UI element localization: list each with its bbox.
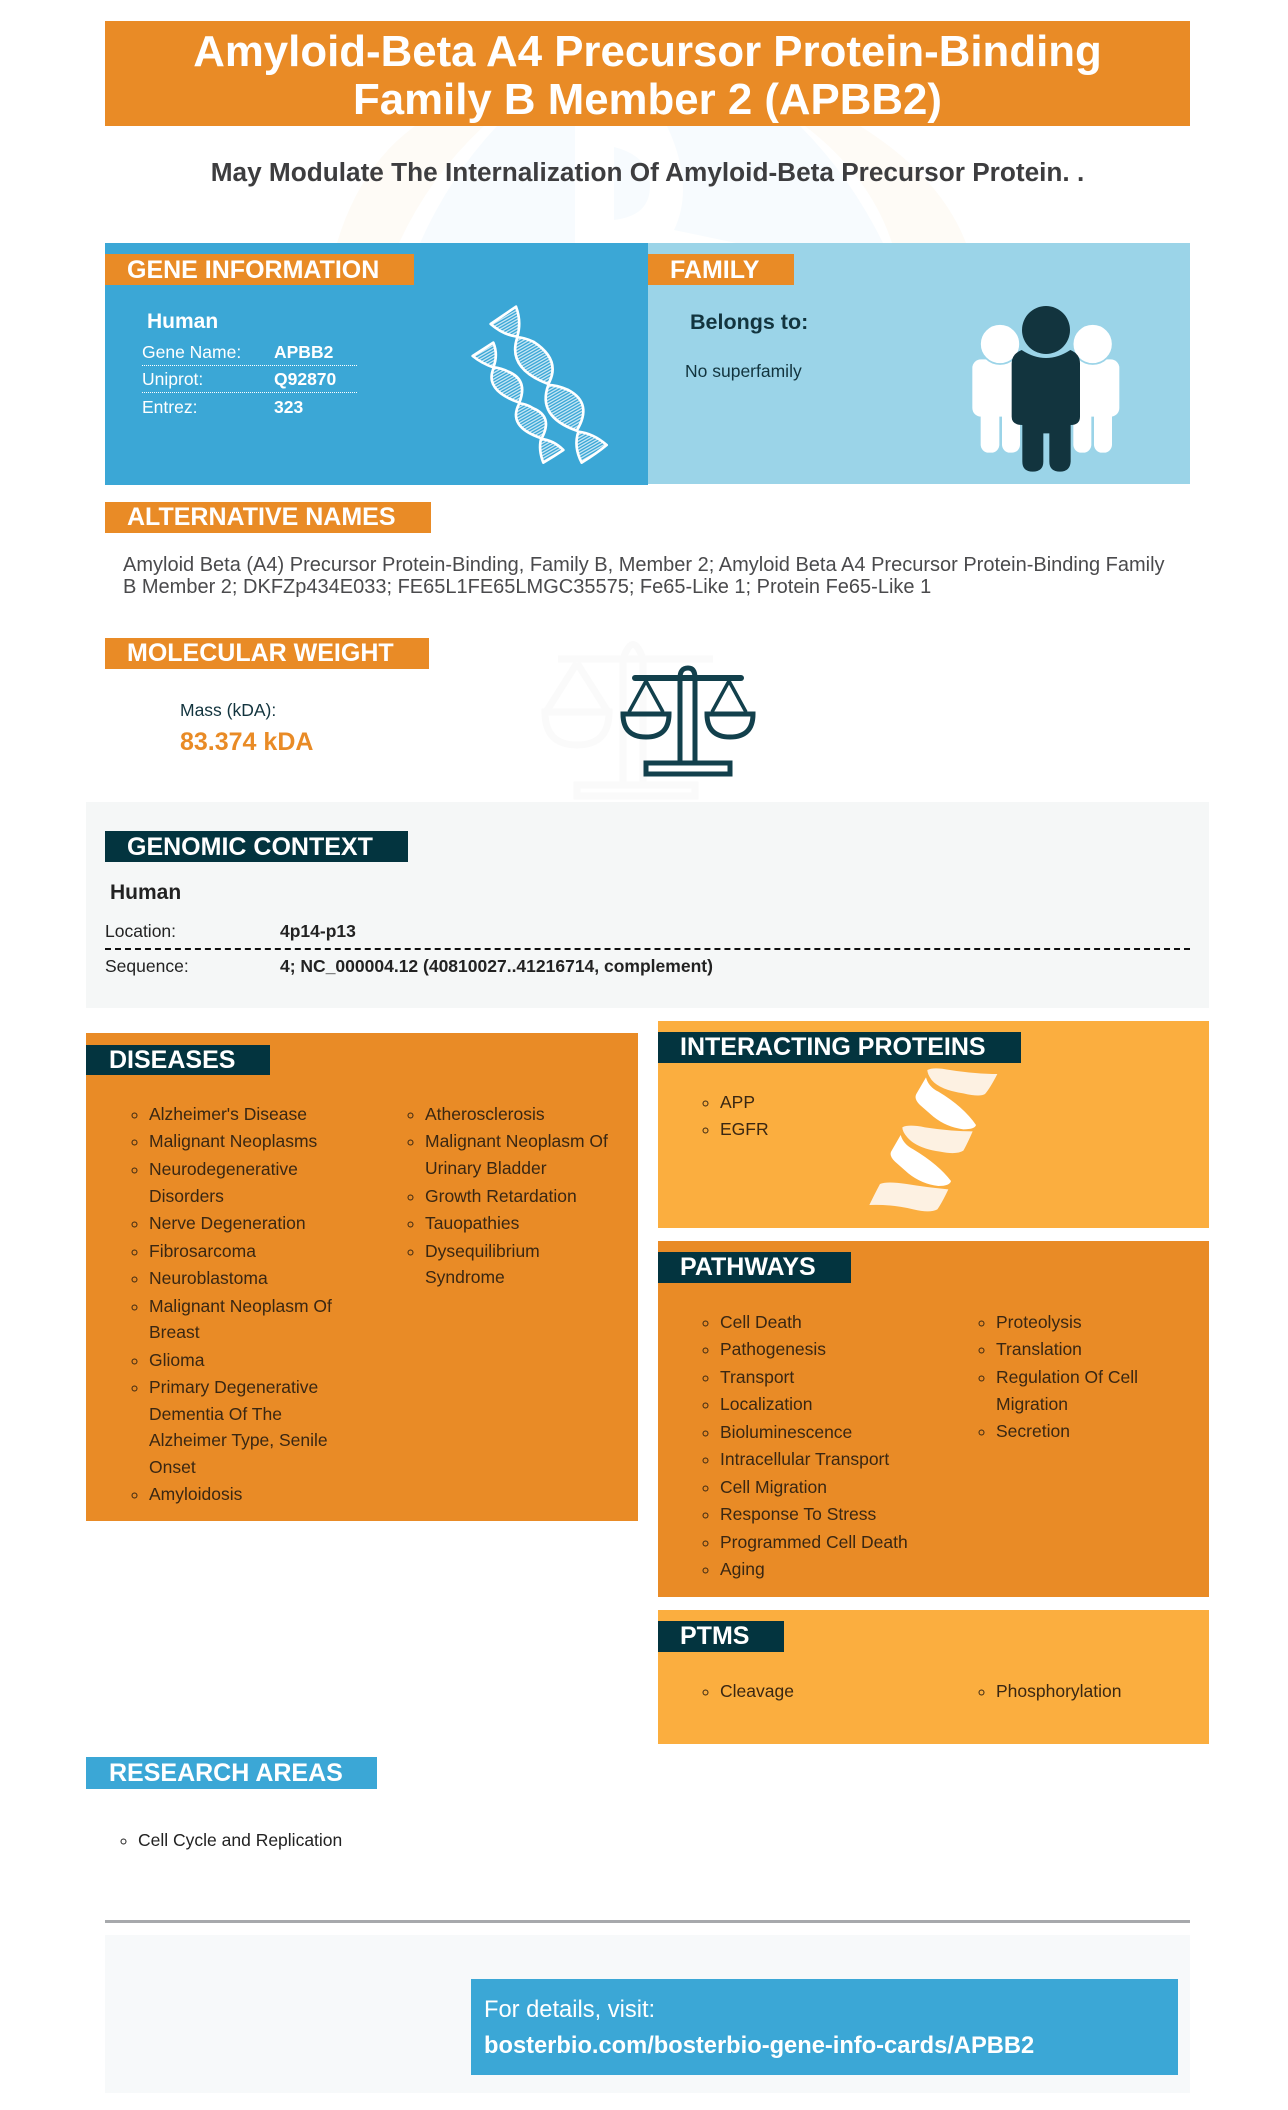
panel: PTMs xyxy=(658,1610,1209,1744)
list: diseases column 2: Syndrome xyxy=(425,1267,505,1287)
panel: diseases xyxy=(86,1033,638,1521)
title: Amyloid-Beta A4 Precursor Protein-Binding xyxy=(193,27,1102,76)
list: pathways column 1: Bioluminescence xyxy=(720,1422,852,1442)
heading: genomic context: GENOMIC CONTEXT xyxy=(127,833,373,861)
location row xyxy=(105,921,356,941)
heading: family xyxy=(648,254,794,285)
panel: pathways xyxy=(658,1241,1209,1597)
title: Family B Member 2 (APBB2) xyxy=(353,75,942,124)
text: for details: For details, visit: xyxy=(484,1997,655,2023)
list: diseases column 1: Breast xyxy=(149,1322,200,1342)
text: belongs to: Belongs to: xyxy=(690,310,808,334)
list: diseases column 1: Glioma xyxy=(149,1350,204,1370)
entrez row: Entrez: xyxy=(142,397,197,417)
list: diseases column 2: Growth Retardation xyxy=(425,1186,577,1206)
list: diseases column 2: Urinary Bladder xyxy=(425,1158,547,1178)
heading: alternative names: ALTERNATIVE NAMES xyxy=(127,503,396,531)
text: alternative names xyxy=(123,554,1165,598)
list: diseases column 1: Alzheimer's Disease xyxy=(149,1104,307,1124)
list: pathways column 2: Migration xyxy=(996,1394,1068,1414)
list: diseases column 2: Malignant Neoplasm Of xyxy=(425,1131,608,1151)
list: interacting proteins: EGFR xyxy=(720,1119,769,1139)
sequence row: Sequence: xyxy=(105,956,189,976)
icon: protein helix ribbon xyxy=(869,1068,998,1212)
list: pathways column 1: Programmed Cell Death xyxy=(720,1532,908,1552)
list: diseases column 1 xyxy=(132,1104,332,1504)
list: diseases column 1: Fibrosarcoma xyxy=(149,1241,256,1261)
text: no superfamily: No superfamily xyxy=(685,361,802,381)
list: pathways column 1: Cell Death xyxy=(720,1312,802,1332)
list: pathways column 2: Translation xyxy=(996,1339,1082,1359)
heading: interacting proteins: INTERACTING PROTEINS xyxy=(680,1033,986,1061)
list: research areas: Cell Cycle and Replication xyxy=(138,1830,342,1850)
list: pathways column 1 xyxy=(702,1312,908,1579)
entrez row: 323 xyxy=(274,397,303,417)
heading: research areas: RESEARCH AREAS xyxy=(109,1759,343,1787)
panel: interacting proteins xyxy=(658,1021,1209,1228)
uniprot row xyxy=(142,366,357,393)
list: pathways column 1: Response To Stress xyxy=(720,1504,876,1524)
panel: gene information xyxy=(105,243,648,485)
list: pathways column 2: Secretion xyxy=(996,1421,1070,1441)
list: diseases column 1: Malignant Neoplasms xyxy=(149,1131,317,1151)
panel: genomic context xyxy=(86,802,1209,1008)
text: mass label: Mass (kDA): xyxy=(180,700,276,720)
list: pathways column 1: Cell Migration xyxy=(720,1477,827,1497)
icon: DNA strands xyxy=(471,305,608,464)
heading: diseases: DISEASES xyxy=(109,1046,235,1074)
list: PTMs column 1: Cleavage xyxy=(720,1681,794,1701)
heading: diseases xyxy=(86,1045,270,1075)
list: diseases column 1: Dementia Of The xyxy=(149,1404,282,1424)
text: url: bosterbio.com/bosterbio-gene-info-cards/APBB2 xyxy=(484,2033,1034,2059)
callout: details link xyxy=(471,1979,1178,2075)
list: diseases column 1: Neurodegenerative xyxy=(149,1159,298,1179)
icon: group of people xyxy=(972,306,1120,472)
list: diseases column 1: Primary Degenerative xyxy=(149,1377,318,1397)
list: diseases column 2: Dysequilibrium xyxy=(425,1241,540,1261)
decorative watermark: faint logo arches xyxy=(338,126,966,243)
text: species: Human xyxy=(147,310,218,333)
panel: footer xyxy=(105,1935,1190,2093)
list: diseases column 1: Alzheimer Type, Senile xyxy=(149,1430,328,1450)
text: alternative names: B Member 2; DKFZp434E033; FE65L1FE65LMGC35575; Fe65-Like 1; Protein Fe65-Like 1 xyxy=(123,576,931,598)
panel: family xyxy=(648,243,1190,484)
subtitle: May Modulate The Internalization Of Amyloid-Beta Precursor Protein. . xyxy=(211,157,1084,187)
gene name row: Gene Name: xyxy=(142,342,241,362)
list: diseases column 2: Tauopathies xyxy=(425,1213,519,1233)
heading: family: FAMILY xyxy=(670,256,759,284)
list: diseases column 1: Malignant Neoplasm Of xyxy=(149,1296,332,1316)
sequence row: 4; NC_000004.12 (40810027..41216714, complement) xyxy=(280,956,713,976)
gene name row: APBB2 xyxy=(274,342,333,362)
entrez row xyxy=(142,397,303,417)
heading: pathways: PATHWAYS xyxy=(680,1253,816,1281)
list: diseases column 1: Onset xyxy=(149,1457,196,1477)
heading: PTMs xyxy=(658,1621,784,1652)
list: pathways column 1: Pathogenesis xyxy=(720,1339,826,1359)
list: interacting proteins: APP xyxy=(720,1092,755,1112)
icon: ghost balance scale xyxy=(535,640,725,805)
list: pathways column 1: Localization xyxy=(720,1394,812,1414)
icon: balance scale xyxy=(620,666,756,776)
uniprot row: Uniprot: xyxy=(142,369,203,389)
list: pathways column 2 xyxy=(978,1312,1138,1441)
text: species: Human xyxy=(110,881,181,904)
text: mass value: 83.374 kDA xyxy=(180,728,313,756)
title xyxy=(105,21,1190,126)
list: pathways column 2: Proteolysis xyxy=(996,1312,1082,1332)
list: pathways column 1: Aging xyxy=(720,1559,765,1579)
list: diseases column 2: Atherosclerosis xyxy=(425,1104,545,1124)
list: pathways column 1: Intracellular Transport xyxy=(720,1449,889,1469)
heading: PTMs: PTMS xyxy=(680,1622,749,1650)
heading: pathways xyxy=(658,1252,851,1283)
text: alternative names: Amyloid Beta (A4) Precursor Protein-Binding, Family B, Member 2; Amyloid Beta A4 Precursor Protein-Binding Family xyxy=(123,554,1165,576)
gene name row xyxy=(142,339,357,366)
list: pathways column 1: Transport xyxy=(720,1367,794,1387)
uniprot row: Q92870 xyxy=(274,369,336,389)
list: pathways column 2: Regulation Of Cell xyxy=(996,1367,1138,1387)
list: diseases column 1: Disorders xyxy=(149,1186,224,1206)
list: diseases column 1: Amyloidosis xyxy=(149,1484,242,1504)
list: interacting proteins xyxy=(702,1092,769,1139)
heading: gene information: GENE INFORMATION xyxy=(127,256,379,284)
location row: 4p14-p13 xyxy=(280,921,356,941)
list: PTMs column 2: Phosphorylation xyxy=(996,1681,1122,1701)
list: diseases column 1: Neuroblastoma xyxy=(149,1268,268,1288)
list: diseases column 2 xyxy=(408,1104,608,1287)
location row: Location: xyxy=(105,921,176,941)
list: diseases column 1: Nerve Degeneration xyxy=(149,1213,306,1233)
heading: molecular weight: MOLECULAR WEIGHT xyxy=(127,639,394,667)
